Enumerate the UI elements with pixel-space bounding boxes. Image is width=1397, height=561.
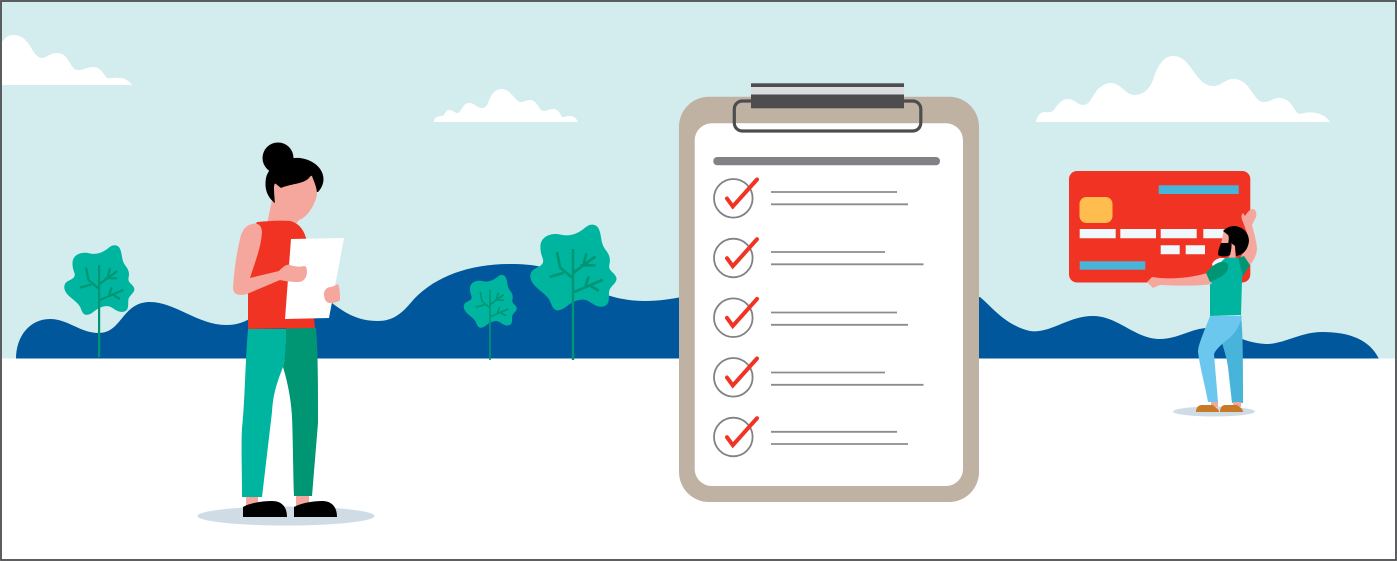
clipboard checklist <box>679 83 979 502</box>
card: body <box>1069 171 1250 282</box>
man: ankles <box>1211 402 1241 407</box>
woman: arm holding paper <box>279 265 307 282</box>
man: neck and ear <box>1226 244 1236 262</box>
cloud: centre <box>434 89 578 122</box>
tree: left <box>64 245 134 357</box>
woman: neck <box>267 200 305 224</box>
checklist: heading bar <box>713 157 940 165</box>
credit card <box>1069 171 1250 282</box>
man: raised arm <box>1240 209 1257 266</box>
cloud: right <box>1036 56 1330 122</box>
ground <box>2 358 1395 560</box>
woman: ground shadow <box>198 506 374 526</box>
man: collar <box>1212 258 1225 267</box>
man: arm supporting card <box>1147 273 1212 288</box>
man carrying credit card <box>1069 171 1257 416</box>
cloud: left <box>2 35 132 85</box>
man: hair <box>1223 226 1249 256</box>
man: ground shadow <box>1173 406 1255 416</box>
woman: paper <box>285 238 344 319</box>
woman: hair <box>265 158 324 204</box>
clipboard: board <box>679 97 979 502</box>
card: top blue stripe <box>1159 185 1239 194</box>
man: beard <box>1218 243 1231 256</box>
man: shirt <box>1210 258 1243 316</box>
clipboard: paper <box>695 123 963 486</box>
tree: small middle <box>464 275 517 360</box>
woman: second hand <box>324 284 340 303</box>
man: trousers, back leg <box>1222 315 1243 403</box>
checklist: item 1 <box>714 179 908 218</box>
checklist: item 4 <box>714 358 924 397</box>
card: bottom blue stripe <box>1080 261 1145 270</box>
woman: trousers, far leg <box>283 328 318 496</box>
man: face <box>1221 229 1230 244</box>
woman: ankles <box>246 495 309 507</box>
clipboard: clip loop <box>734 101 921 131</box>
woman: arm and hand <box>233 223 307 295</box>
checklist: item 2 <box>714 239 924 277</box>
checklist: item 3 <box>714 298 908 337</box>
sky background <box>0 0 1397 359</box>
checklist: item 5 <box>714 418 908 456</box>
woman: bun <box>262 142 294 174</box>
woman: top <box>248 221 315 329</box>
woman reading a paper <box>198 142 374 526</box>
woman: trousers, near leg <box>242 329 287 497</box>
card: chip <box>1080 197 1112 223</box>
man: shoes <box>1196 405 1243 412</box>
man: upper sleeve <box>1206 262 1228 282</box>
tree: large <box>530 225 616 360</box>
hills: dark blue waves <box>16 264 1379 359</box>
man: trousers, front leg <box>1198 316 1242 402</box>
woman: face <box>274 176 317 221</box>
clipboard: clip bar <box>751 83 904 108</box>
woman: shoes <box>243 501 337 517</box>
man: shoulder sleeve <box>1238 256 1250 276</box>
card: number blocks <box>1080 229 1228 254</box>
